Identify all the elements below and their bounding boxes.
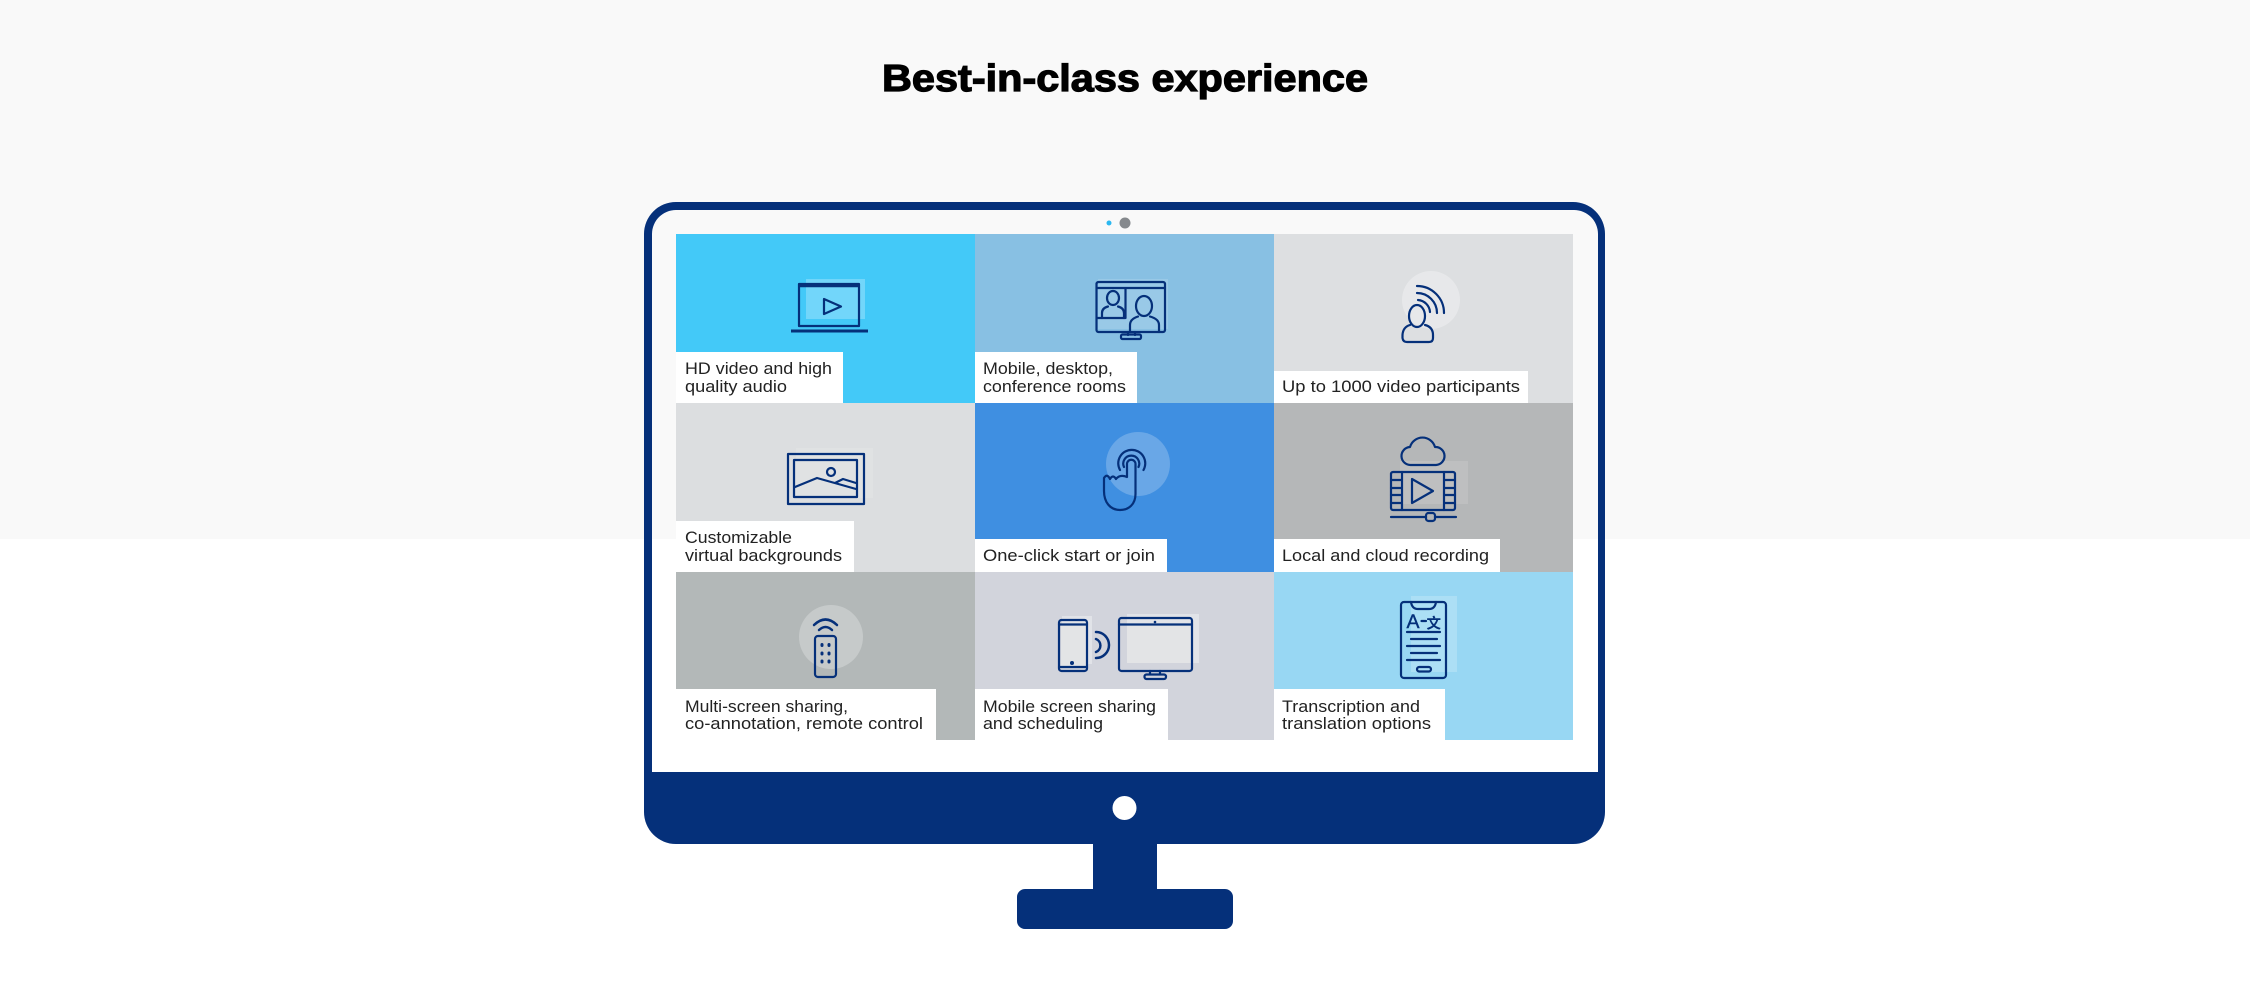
monitor stand [1017,840,1233,929]
label: HD video and high [685,360,832,378]
icon: phone with translation: 文 [1426,614,1442,632]
tile background [1274,572,1573,740]
icon: video conference on monitor [1096,279,1168,339]
monitor [644,202,1605,929]
label [676,352,843,403]
tile background [676,403,975,572]
icon: phone casting to monitor [1059,614,1199,679]
tile background [975,234,1274,403]
feature tile: Multi-screen sharing, co-annotation, remote control [676,572,975,740]
label [975,689,1168,740]
feature tile: Up to 1000 video participants [1274,234,1573,403]
label: One-click start or join [983,547,1155,565]
label: Mobile, desktop, [983,360,1113,378]
label: conference rooms [983,378,1126,396]
label [1274,539,1500,572]
title: Best-in-class experience [882,58,1368,100]
tile background [676,572,975,740]
feature tile: Mobile screen sharing and scheduling [975,572,1274,740]
label: Mobile screen sharing [983,698,1156,716]
icon: participant with signal waves [1402,271,1460,342]
label: translation options [1282,715,1431,733]
label: virtual backgrounds [685,547,842,565]
tile background [1274,403,1573,572]
monitor frame [644,202,1605,844]
label: Transcription and [1282,698,1420,716]
camera lens [1120,218,1130,228]
label: co-annotation, remote control [685,715,923,733]
page background band [0,0,2250,539]
label [975,352,1137,403]
label [1274,689,1445,740]
feature tile: Local and cloud recording [1274,403,1573,572]
icon: remote control [799,605,863,677]
tile background [975,403,1274,572]
label: Customizable [685,529,792,547]
feature tile: One-click start or join [975,403,1274,572]
icon: landscape picture [788,448,873,504]
icon: cloud and film strip [1391,438,1468,521]
label: quality audio [685,378,787,396]
label: Up to 1000 video participants [1282,378,1520,396]
label [1274,371,1528,403]
icon: finger tap [1104,432,1170,510]
icon: phone with translation [1401,596,1457,678]
label: Multi-screen sharing, [685,698,848,716]
tile background [1274,234,1573,403]
icon: laptop with play button [791,279,868,331]
feature tile: Mobile, desktop, conference rooms [975,234,1274,403]
feature tile: Transcription and translation options [1274,572,1573,740]
label [676,689,936,740]
label: Local and cloud recording [1282,547,1489,565]
feature tile: HD video and high quality audio [676,234,975,403]
tile background [676,234,975,403]
camera indicator light [1106,220,1112,226]
home button [1112,796,1136,820]
label [676,521,854,572]
icon: phone with translation: A [1406,611,1420,633]
label [975,539,1167,572]
feature tile: Customizable virtual backgrounds [676,403,975,572]
label: and scheduling [983,715,1103,733]
tile background [975,572,1274,740]
